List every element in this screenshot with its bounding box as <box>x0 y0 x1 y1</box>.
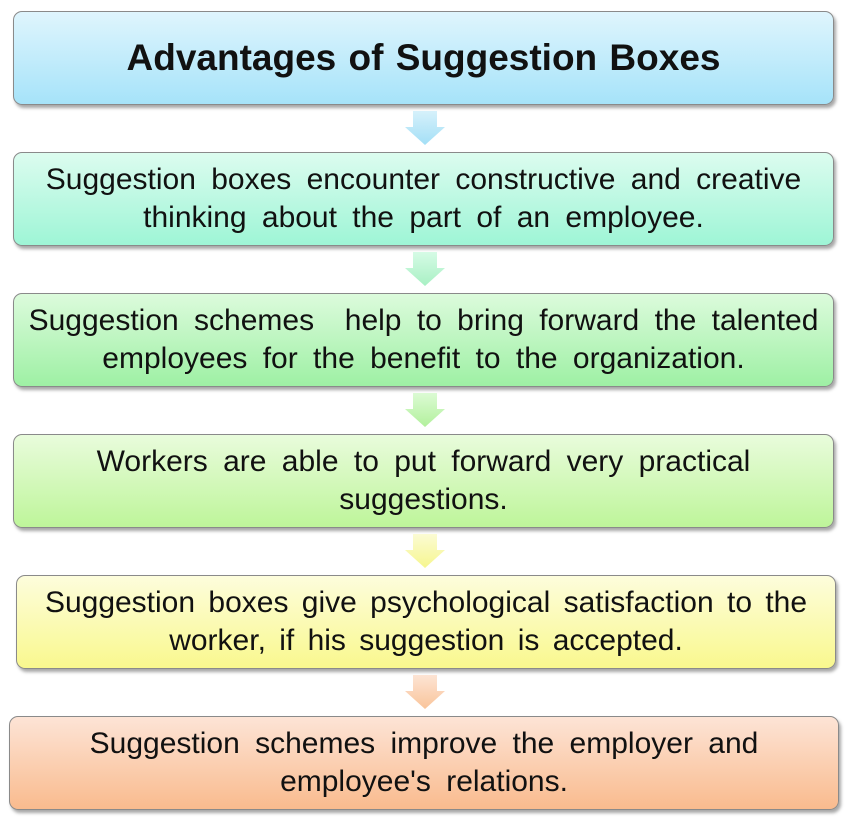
box 4: Suggestion boxes give psychological satisfaction to the <box>45 586 807 619</box>
box 1 <box>13 152 834 246</box>
box 1: Suggestion boxes encounter constructive and creative <box>46 163 801 196</box>
box 5: Suggestion schemes improve the employer and <box>90 727 758 760</box>
box 2: Suggestion schemes help to bring forward the talented <box>29 304 818 337</box>
box 1: thinking about the part of an employee. <box>143 201 704 234</box>
title: Advantages of Suggestion Boxes <box>126 37 720 78</box>
box 5 <box>9 716 839 810</box>
box 3: suggestions. <box>339 483 508 516</box>
box 3: Workers are able to put forward very practical <box>97 445 750 478</box>
arrow 4 <box>405 534 445 568</box>
arrow 2 <box>405 252 445 286</box>
arrow 3 <box>405 393 445 427</box>
title <box>13 11 834 105</box>
box 4: worker, if his suggestion is accepted. <box>169 624 683 657</box>
arrow 5 <box>405 675 445 709</box>
box 4 <box>16 575 836 669</box>
arrow 1 <box>405 111 445 145</box>
box 2 <box>13 293 834 387</box>
box 3 <box>13 434 834 528</box>
box 5: employee's relations. <box>280 765 568 798</box>
box 2: employees for the benefit to the organization. <box>102 342 745 375</box>
